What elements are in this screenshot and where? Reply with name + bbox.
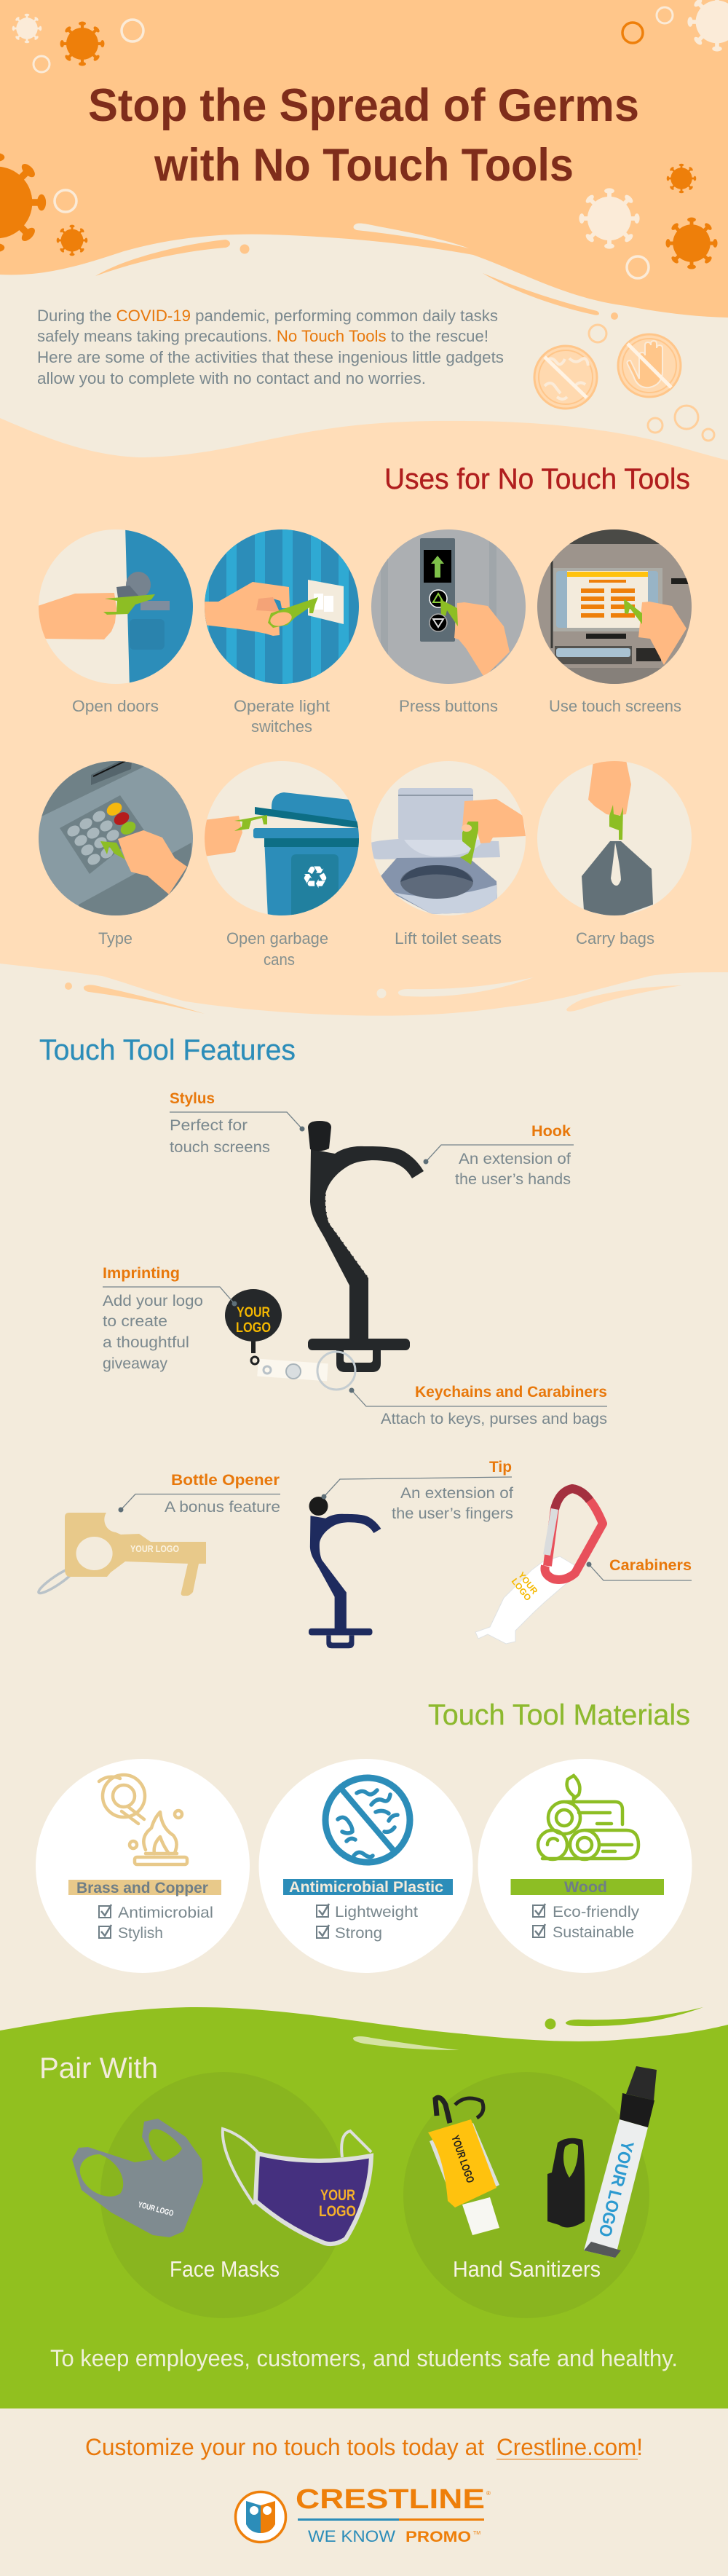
swooshes under header: [95, 224, 618, 320]
callout: keychains and carabiners: Keychains and Carabiners: [415, 1384, 607, 1401]
panel: light switches: [204, 529, 359, 736]
callout: tip: Tip: [489, 1459, 512, 1476]
callout: tip: the user’s fingers: [392, 1505, 513, 1522]
callout: imprinting: a thoughtful: [103, 1334, 189, 1351]
panel: wood: Eco-friendly: [553, 1904, 640, 1921]
panel: garbage cans: cans: [264, 950, 295, 969]
panel: antimicrobial plastic: Antimicrobial Plastic: [289, 1879, 443, 1896]
panel: garbage cans: [204, 761, 363, 969]
callout: bottle opener: [118, 1472, 280, 1516]
background: header band: [0, 0, 728, 318]
panel: carry bags: [537, 760, 692, 948]
background: uses section band: [0, 418, 728, 1016]
panel: brass and copper: Antimicrobial: [118, 1905, 213, 1921]
icon: owl: [246, 2501, 275, 2533]
call to action: Customize your no touch tools today at: [85, 2434, 484, 2460]
panel: touch screens: Use touch screens: [549, 697, 681, 715]
callout: stylus: Stylus: [170, 1090, 215, 1107]
panel: antimicrobial plastic: Strong: [335, 1925, 382, 1942]
callout: hook: Hook: [531, 1123, 571, 1140]
panel: face masks: YOUR: [320, 2187, 355, 2204]
spray pen: YOUR LOGO: [595, 2139, 637, 2239]
callout: hook: [424, 1123, 574, 1188]
title: [88, 80, 639, 191]
panel: wood: Sustainable: [553, 1924, 634, 1941]
panel: type: [39, 759, 193, 948]
heading: pair with: Pair With: [39, 2052, 158, 2084]
callout: bottle opener: Bottle Opener: [171, 1472, 280, 1489]
panel: hand sanitizers: YOUR LOGO: [448, 2134, 477, 2185]
panel: brass and copper: [36, 1759, 250, 1973]
icon: no germs badge: [534, 346, 597, 409]
intro text: [37, 307, 504, 387]
title: with No Touch Tools: [154, 140, 574, 191]
logo: crestline: PROMO: [405, 2529, 471, 2545]
background: green band: [0, 2007, 728, 2408]
panel: touch screens: [537, 529, 692, 715]
icon: no touch hand badge: [618, 334, 681, 397]
panel: light switches: switches: [251, 717, 312, 736]
heading: uses: Uses for No Touch Tools: [384, 463, 690, 495]
key ring: [317, 1352, 355, 1390]
callout: tip: An extension of: [400, 1485, 513, 1502]
panel: type: Type: [98, 929, 132, 948]
icon: logs: [538, 1776, 638, 1859]
navy touch tool: [309, 1497, 381, 1648]
black holder: [547, 2138, 585, 2228]
badge reel with logo: [225, 1289, 328, 1381]
gray mask: [72, 2119, 203, 2237]
panel: antimicrobial plastic: Lightweight: [335, 1904, 418, 1921]
purple mask: [256, 2154, 371, 2244]
red carabiner and white tool: [475, 1489, 603, 1644]
panel: press buttons: [371, 529, 526, 715]
callout: keychains and carabiners: Attach to keys, purses and bags: [381, 1411, 607, 1427]
sanitizer bottle on clip: [430, 2123, 499, 2207]
logo: crestline: CRESTLINE: [296, 2484, 485, 2515]
intro text: Here are some of the activities that these ingenious little gadgets: [37, 348, 504, 366]
badge reel with logo: LOGO: [236, 1320, 271, 1336]
decorative germs and bubbles in header: [0, 0, 728, 278]
panel: toilet seats: [368, 761, 526, 948]
panel: carry bags: Carry bags: [576, 929, 654, 948]
panel: brass and copper: Brass and Copper: [76, 1880, 208, 1896]
heading: features: Touch Tool Features: [39, 1034, 296, 1066]
spray pen: [584, 2066, 657, 2258]
black touch tool: [308, 1121, 424, 1372]
panel: face masks: LOGO: [319, 2203, 356, 2220]
logo: crestline: WE KNOW: [308, 2527, 395, 2545]
icon: recycle: ♻: [301, 859, 329, 895]
panel: brass and copper: Stylish: [118, 1925, 163, 1942]
closing sentence: To keep employees, customers, and students safe and healthy.: [50, 2345, 678, 2371]
panel: hand sanitizers: Hand Sanitizers: [453, 2256, 601, 2282]
callout: hook: An extension of: [459, 1151, 571, 1167]
panel: toilet seats: Lift toilet seats: [395, 929, 502, 948]
call to action: Crestline.com!: [496, 2434, 643, 2460]
panel: open doors: [39, 529, 193, 715]
panel: hand sanitizers: [403, 2066, 657, 2318]
callout: imprinting: giveaway: [103, 1355, 167, 1372]
panel: open doors: Open doors: [72, 697, 159, 715]
callout: hook: the user’s hands: [455, 1171, 571, 1188]
callout: imprinting: [103, 1265, 237, 1372]
intro text: During the COVID-19 pandemic, performing common daily tasks: [37, 307, 498, 325]
red carabiner and white tool: YOUR: [516, 1570, 540, 1596]
callout: tip: [322, 1459, 513, 1522]
swooshes on green band: [353, 2007, 703, 2050]
panel: face masks: [72, 2072, 371, 2318]
logo: crestline: ®: [486, 2490, 491, 2497]
panel: wood: [478, 1759, 692, 1973]
callout: stylus: Perfect for: [170, 1117, 248, 1134]
intro text: safely means taking precautions. No Touch Tools to the rescue!: [37, 327, 488, 345]
callout: bottle opener: A bonus feature: [165, 1499, 280, 1516]
icon: no germs: [325, 1778, 410, 1862]
logo: crestline: [236, 2484, 491, 2545]
panel: wood: Wood: [564, 1879, 607, 1896]
callout: carabiners: [587, 1557, 692, 1580]
bubbles near badges: [589, 325, 714, 441]
panel: face masks: YOUR LOGO: [137, 2200, 175, 2218]
panel: face masks: Face Masks: [170, 2256, 280, 2282]
callout: stylus: [170, 1090, 304, 1156]
brass bottle opener tool: [36, 1513, 206, 1596]
logo: crestline: TM: [473, 2531, 480, 2536]
panel: garbage cans: Open garbage: [226, 929, 328, 948]
icon: molten metal: [99, 1775, 187, 1864]
callout: keychains and carabiners: [349, 1384, 607, 1427]
intro text: allow you to complete with no contact and no worries.: [37, 369, 426, 387]
panel: antimicrobial plastic: [259, 1759, 473, 1973]
callout: imprinting: Imprinting: [103, 1265, 180, 1282]
heading: materials: Touch Tool Materials: [428, 1699, 690, 1731]
badge reel with logo: YOUR: [237, 1305, 270, 1320]
title: Stop the Spread of Germs: [88, 80, 639, 131]
swooshes above features: [65, 977, 682, 1014]
callout: imprinting: Add your logo: [103, 1293, 203, 1309]
callout: imprinting: to create: [103, 1313, 167, 1330]
callout: stylus: touch screens: [170, 1139, 270, 1156]
callout: carabiners: Carabiners: [609, 1557, 692, 1574]
panel: press buttons: Press buttons: [399, 697, 498, 715]
panel: light switches: Operate light: [234, 697, 330, 715]
red carabiner and white tool: LOGO: [510, 1576, 534, 1603]
brass bottle opener tool: YOUR LOGO: [130, 1544, 179, 1554]
